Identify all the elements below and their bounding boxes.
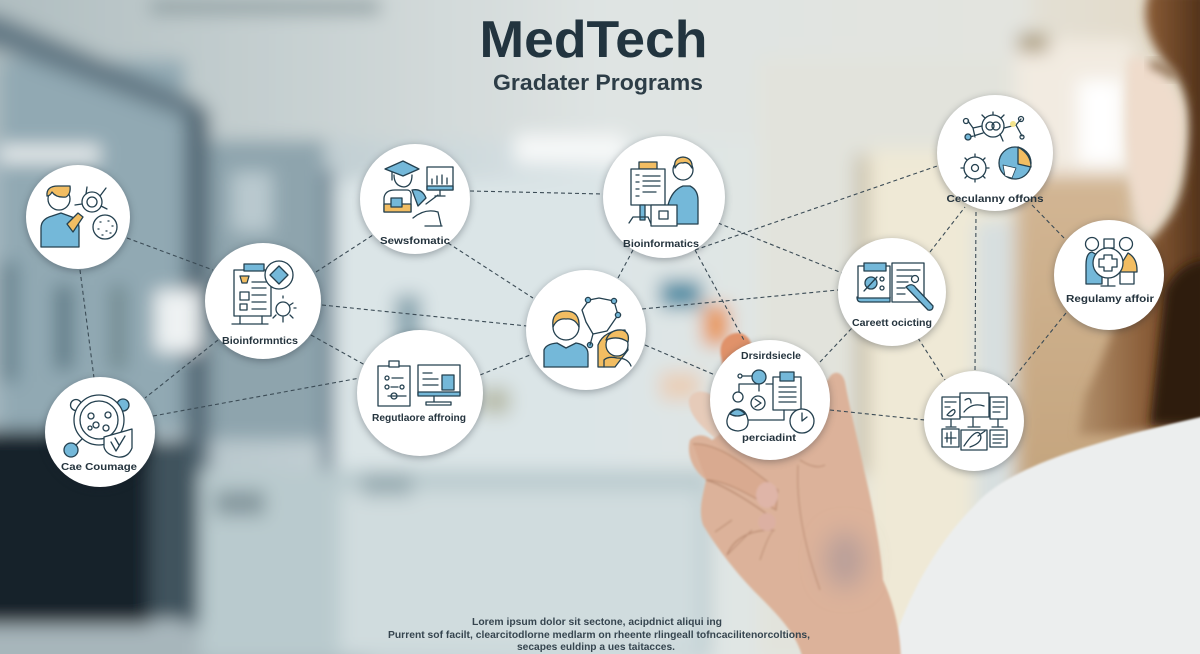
node: regulatore affoing	[357, 330, 483, 456]
node: central team with molecule	[526, 270, 646, 390]
footer text: secapes euldinp a ues taitacces.	[517, 641, 675, 653]
icon: graduate with monitor	[384, 161, 453, 226]
dashed connector lines	[80, 165, 1066, 420]
node: drsirdsiecle perciadint	[710, 340, 830, 460]
icon: two people with medical cross	[1086, 238, 1137, 286]
icon: molecules and globe	[961, 112, 1031, 182]
node: display panels	[924, 371, 1024, 471]
node: bioinformatics left	[205, 243, 321, 359]
icon: presenter at board and podium	[629, 157, 698, 226]
footer text: Lorem ipsum dolor sit sectone, acipdnict aliqui ing	[472, 616, 722, 628]
label: Cae Coumage	[61, 461, 137, 473]
title	[480, 11, 708, 95]
node: researcher with molecule	[26, 165, 130, 269]
title: MedTech	[480, 11, 708, 69]
icon: researcher	[41, 186, 117, 247]
label: Careett ocicting	[852, 317, 932, 329]
icon: petri dish with shield	[64, 395, 132, 457]
label: Regutlaore affroing	[372, 412, 466, 424]
node: regulamy affoir	[1054, 220, 1164, 330]
icon: clipboard and monitor	[378, 361, 460, 406]
icon: six chart panels	[942, 393, 1007, 450]
node: cae coumage	[45, 377, 155, 487]
node: ceculanny offons	[937, 95, 1053, 211]
top label: Drsirdsiecle	[741, 350, 801, 362]
node: careett ocicting	[838, 238, 946, 346]
icon: two people with molecule	[544, 297, 631, 367]
hair and cheek of the foreground woman	[1078, 0, 1200, 435]
icon: document board with cell	[232, 261, 296, 324]
icon: book and magnifier	[857, 263, 933, 310]
node: sewsfomatic	[360, 144, 470, 254]
node: bioinformatics top	[603, 136, 725, 258]
label: Sewsfomatic	[380, 235, 450, 247]
label: Ceculanny offons	[946, 193, 1044, 205]
subtitle: Gradater Programs	[493, 70, 703, 95]
footer text	[388, 616, 810, 653]
footer text: Purrent sof facilt, clearcitodlorne medlarm on rheente rlingeall tofncacilitenorcoltions,	[388, 629, 810, 641]
bottom label: perciadint	[742, 432, 797, 444]
label: Regulamy affoir	[1066, 293, 1154, 305]
icon: flowchart, document and clock	[727, 370, 814, 433]
label: Bioinformatics	[623, 238, 699, 250]
label: Bioinformntics	[222, 335, 298, 347]
pointing hand	[689, 333, 901, 654]
white shirt of the foreground woman	[888, 416, 1200, 654]
